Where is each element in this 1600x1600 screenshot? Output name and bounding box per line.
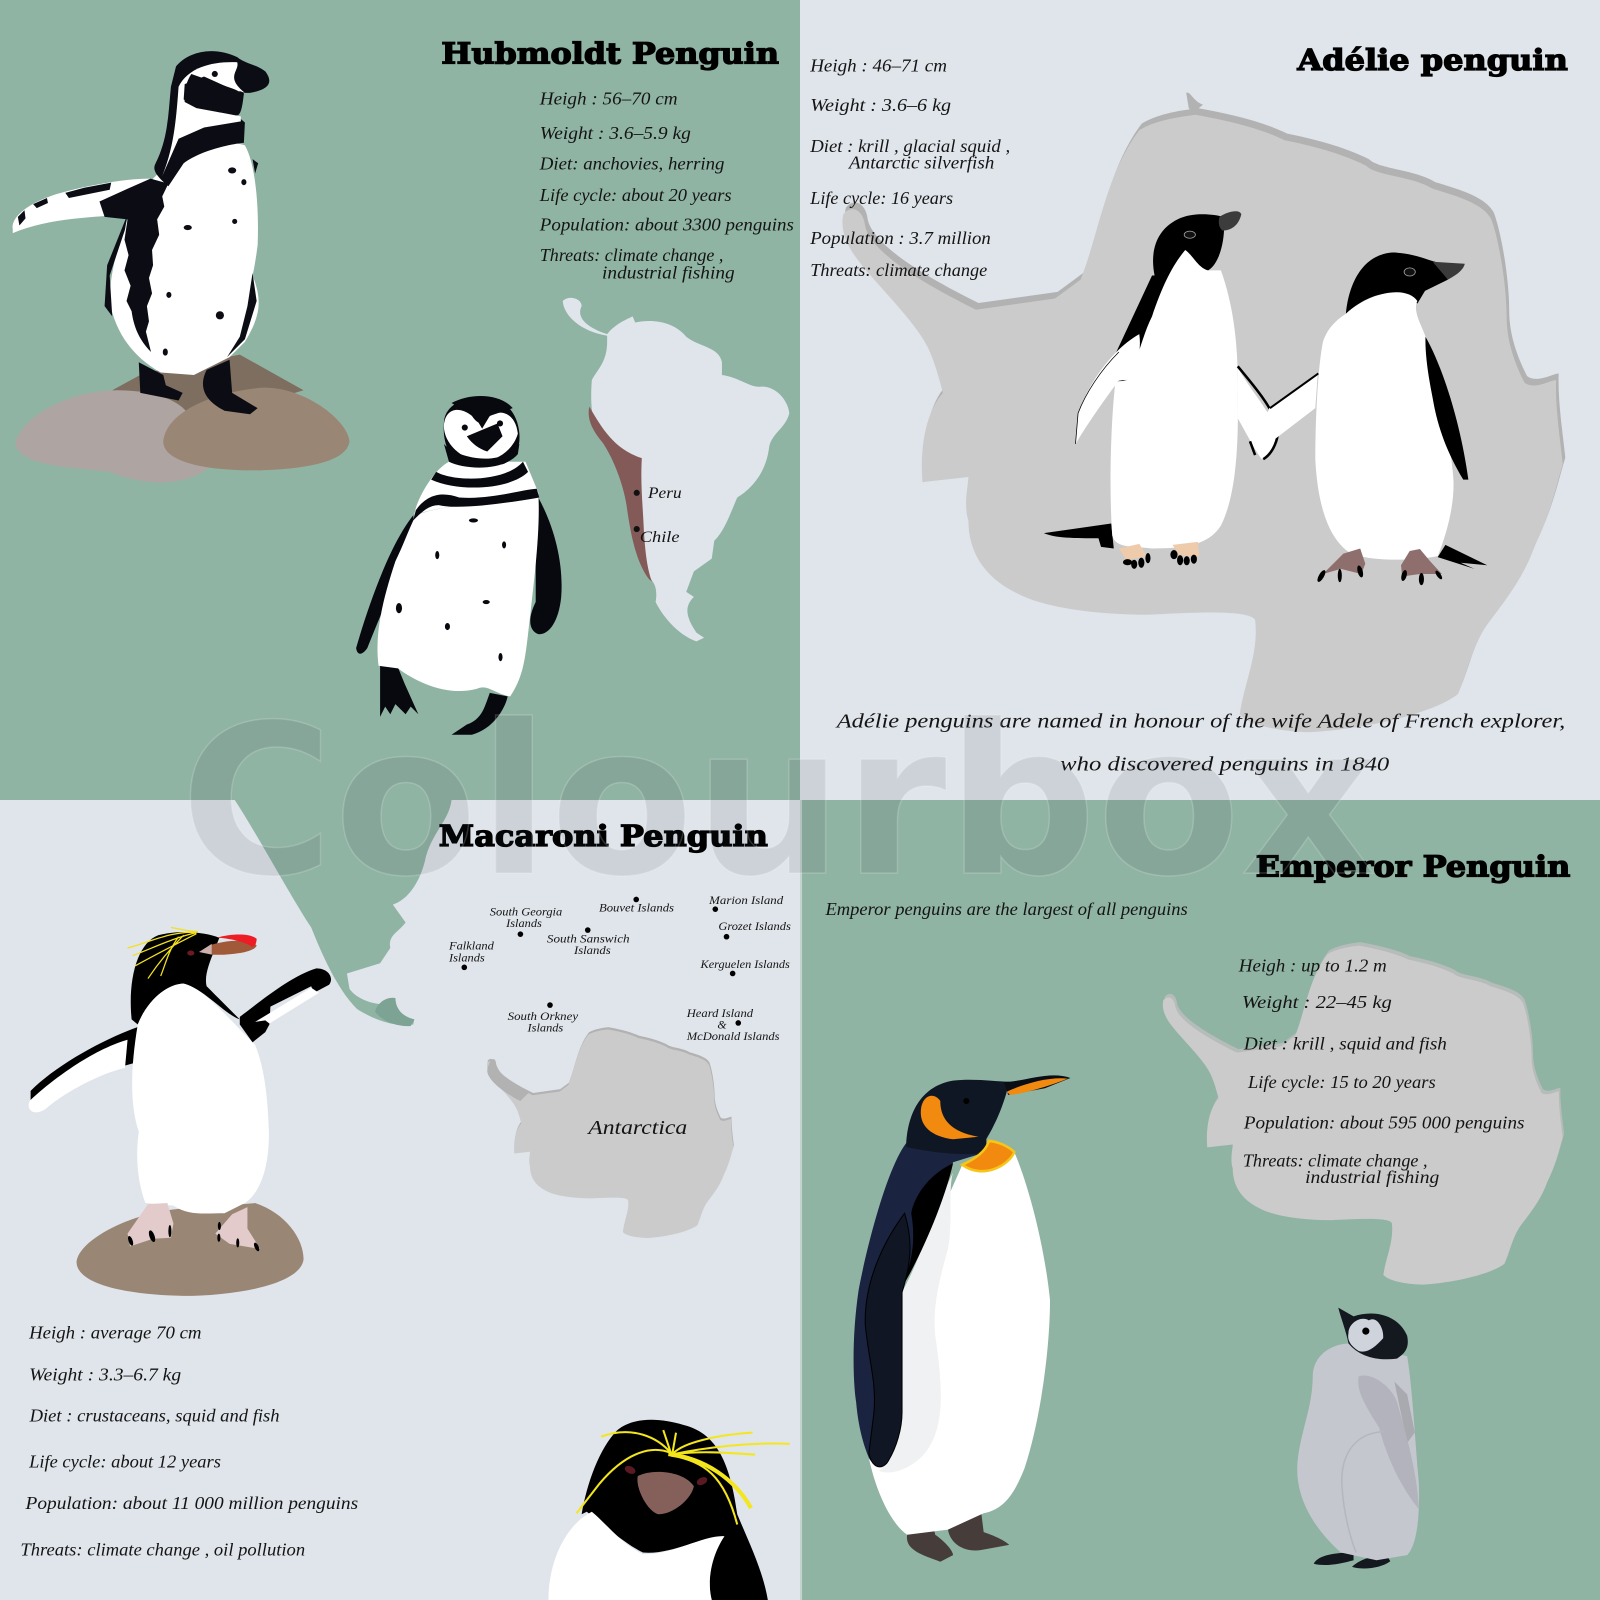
facts: Adelie: Antarctic silverfish [848, 152, 994, 172]
facts: Humboldt: Heigh : 56–70 cm [539, 89, 678, 109]
facts: Adelie: Population : 3.7 million [809, 228, 991, 248]
facts: Emperor: industrial fishing [1305, 1167, 1439, 1187]
caption: Adelie naming note: Adélie penguins are named in honour of the wife Adele of French explorer, [834, 711, 1565, 733]
standing Macaroni penguin [29, 928, 331, 1252]
island labels: South Orkney [508, 1010, 579, 1023]
panel: Macaroni penguin [0, 800, 800, 1600]
adult emperor penguin [854, 1075, 1070, 1562]
heading: Humboldt: Hubmoldt Penguin [441, 36, 779, 70]
facts: Humboldt: Population: about 3300 penguins [539, 215, 794, 235]
caption: Adelie naming note [834, 711, 1565, 775]
note: largest of all penguins: Emperor penguins are the largest of all penguins [825, 899, 1188, 919]
island labels: McDonald Islands [686, 1030, 780, 1043]
facts: Emperor: Diet : krill , squid and fish [1243, 1033, 1447, 1053]
panel: Emperor penguin [800, 800, 1600, 1600]
facts: Adelie: Life cycle: 16 years [809, 188, 953, 208]
facts: Macaroni: Weight : 3.3–6.7 kg [29, 1365, 181, 1385]
facts: Emperor: Threats: climate change , [1243, 1150, 1428, 1170]
map: South America tip [235, 800, 452, 1026]
map: Antarctica small: Antarctica [586, 1117, 687, 1139]
island labels: Kerguelen Islands [699, 958, 790, 971]
island labels: South Georgia [490, 905, 562, 918]
island location dots [461, 897, 741, 1026]
map: Antarctica medium [1163, 942, 1564, 1285]
island labels: South Sanswich [547, 932, 630, 945]
right Adelie penguin [1264, 253, 1487, 585]
standing Humboldt penguin [13, 51, 269, 414]
map: South America with range: Chile [640, 529, 680, 546]
island labels: Islands [526, 1022, 564, 1035]
facts: Macaroni: Heigh : average 70 cm [28, 1322, 202, 1342]
facts: Humboldt [539, 89, 794, 283]
facts: Humboldt: Weight : 3.6–5.9 kg [540, 123, 691, 143]
facts: Adelie [809, 55, 1010, 280]
panel: Adelie penguin [800, 0, 1600, 800]
rocks under standing penguin [15, 355, 349, 482]
island labels: Bouvet Islands [599, 902, 674, 915]
facts: Humboldt: Threats: climate change , [540, 245, 723, 265]
heading: Emperor: Emperor Penguin [1256, 850, 1571, 884]
island labels: Falkland [448, 939, 494, 952]
panel: Humboldt penguin [0, 0, 800, 800]
facts: Emperor: Weight : 22–45 kg [1242, 992, 1392, 1012]
heading: Macaroni: Macaroni Penguin [439, 819, 768, 853]
island labels: Islands [505, 917, 542, 930]
Macaroni penguin portrait [548, 1420, 790, 1600]
island labels: & [717, 1019, 727, 1032]
island labels: Islands [573, 944, 611, 957]
facts: Adelie: Threats: climate change [810, 260, 987, 280]
island labels: Heard Island [686, 1007, 753, 1020]
facts: Adelie: Weight : 3.6–6 kg [810, 95, 951, 115]
facts: Humboldt: industrial fishing [602, 263, 735, 283]
facts: Emperor: Population: about 595 000 penguins [1243, 1113, 1524, 1133]
caption: Adelie naming note: who discovered penguins in 1840 [1060, 753, 1389, 775]
facts: Macaroni: Diet : crustaceans, squid and fish [29, 1405, 280, 1425]
heading: Adelie: Adélie penguin [1296, 43, 1568, 77]
map: South America with range: Peru [647, 485, 682, 502]
facts: Adelie: Heigh : 46–71 cm [809, 55, 947, 75]
front-facing Humboldt penguin [356, 396, 562, 735]
facts: Macaroni [20, 1322, 358, 1560]
facts: Macaroni: Threats: climate change , oil pollution [20, 1540, 305, 1560]
facts: Emperor [1238, 955, 1524, 1187]
watermark: Colourbox: Colourbox [180, 681, 1376, 923]
facts: Emperor: Heigh : up to 1.2 m [1238, 955, 1387, 975]
facts: Emperor: Life cycle: 15 to 20 years [1247, 1072, 1436, 1092]
facts: Adelie: Diet : krill , glacial squid , [809, 136, 1010, 156]
island labels [448, 894, 791, 1043]
left Adelie penguin [1044, 211, 1278, 569]
map: Antarctica large [842, 93, 1565, 732]
island labels: Marion Island [708, 894, 783, 907]
island labels: Islands [448, 952, 485, 965]
map: Antarctica small [487, 1027, 734, 1238]
map: South America with range [563, 298, 789, 641]
island labels: Grozet Islands [718, 920, 791, 933]
emperor chick [1297, 1308, 1419, 1568]
facts: Humboldt: Life cycle: about 20 years [539, 185, 732, 205]
facts: Macaroni: Life cycle: about 12 years [28, 1451, 221, 1471]
facts: Humboldt: Diet: anchovies, herring [539, 153, 724, 173]
facts: Macaroni: Population: about 11 000 million penguins [24, 1493, 358, 1513]
rock under Macaroni penguin [77, 1203, 304, 1296]
